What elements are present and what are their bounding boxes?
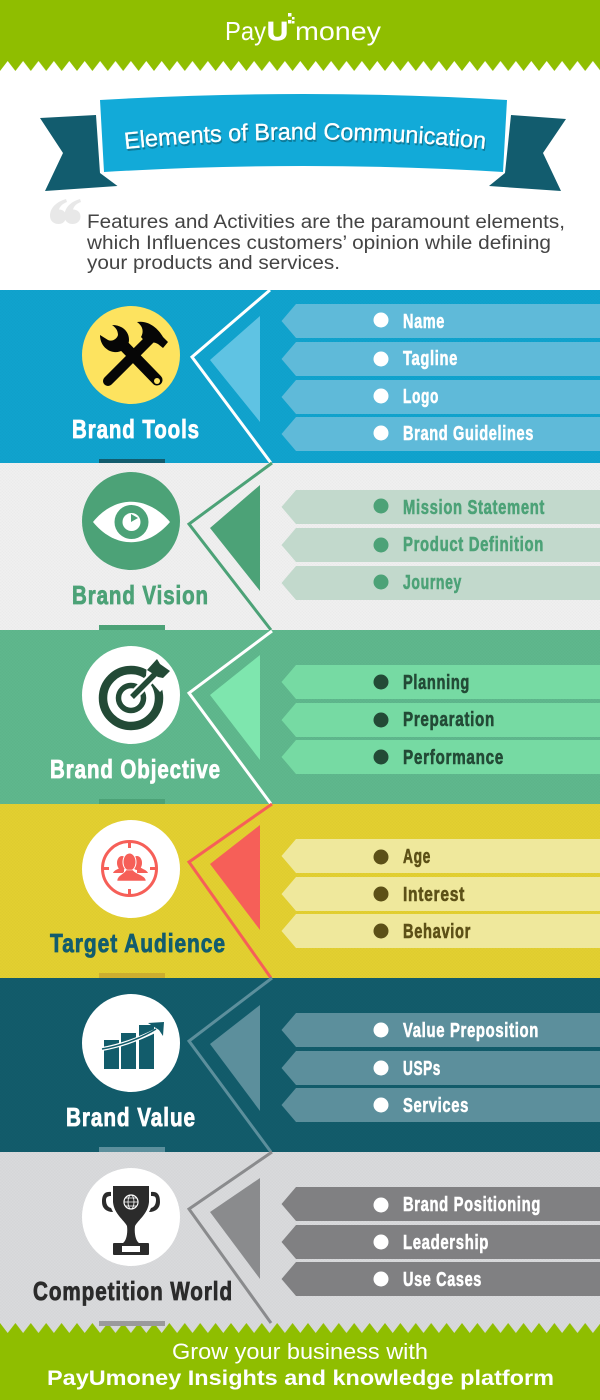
panel: competition world <box>0 1152 600 1333</box>
list: items: Name <box>403 311 445 333</box>
triangle <box>210 825 260 930</box>
list: items: Logo <box>403 386 439 408</box>
list: items: Services <box>403 1095 469 1117</box>
list: items: Product Definition <box>403 534 544 556</box>
list: items <box>282 1187 600 1296</box>
triangle <box>210 655 260 760</box>
icon: quotation mark <box>50 199 81 224</box>
list: items <box>282 665 600 774</box>
footer text: PayUmoney Insights and knowledge platform <box>47 1366 554 1390</box>
chevron outline <box>189 978 272 1152</box>
intro text: which Influences customers’ opinion while defining <box>86 233 551 254</box>
list: items: USPs <box>403 1058 441 1080</box>
footer text <box>47 1339 554 1390</box>
triangle <box>210 1178 260 1279</box>
triangle <box>210 485 260 591</box>
icon: target and arrow <box>82 646 180 744</box>
heading: Competition World <box>33 1276 233 1306</box>
heading: Brand Tools <box>72 414 200 444</box>
footer text: Grow your business with <box>172 1339 428 1364</box>
chevron outline <box>189 804 272 978</box>
icon: audience crosshair <box>82 820 180 918</box>
list: items: Performance <box>403 747 504 769</box>
logo: PayU money <box>225 13 381 46</box>
icon: growth bars <box>82 994 180 1092</box>
list: items <box>282 304 600 451</box>
triangle <box>210 1005 260 1111</box>
triangle <box>210 316 260 422</box>
list: items: Leadership <box>403 1232 489 1254</box>
list: items: Tagline <box>403 348 458 370</box>
panel: brand value <box>0 978 600 1152</box>
list: items: Brand Guidelines <box>403 423 534 445</box>
heading: Brand Vision <box>72 580 209 610</box>
intro text: Features and Activities are the paramount elements, <box>87 212 565 233</box>
icon: eye <box>82 472 180 570</box>
chevron outline <box>189 1152 272 1323</box>
list: items <box>282 1013 600 1122</box>
logo: PayU money: money <box>295 16 381 46</box>
heading: Brand Value <box>66 1102 196 1132</box>
list: items <box>282 839 600 948</box>
heading: Brand Objective <box>50 754 221 784</box>
panel: brand vision <box>0 463 600 630</box>
ribbon title text: Elements of Brand Communication <box>125 122 486 151</box>
panel: brand objective <box>0 630 600 804</box>
intro text <box>86 212 565 274</box>
list: items: Brand Positioning <box>403 1194 541 1216</box>
list: items: Mission Statement <box>403 497 545 519</box>
list: items: Age <box>403 846 431 868</box>
logo: PayU money: Pay <box>225 16 266 46</box>
logo: PayU money: U <box>267 16 288 46</box>
list: items: Interest <box>403 884 465 906</box>
panel: brand tools <box>0 290 600 463</box>
icon: trophy with globe <box>82 1168 180 1266</box>
footer band <box>0 1321 600 1400</box>
list: items: Use Cases <box>403 1269 482 1291</box>
list: items: Value Preposition <box>403 1020 539 1042</box>
chevron outline <box>189 631 272 804</box>
intro text: your products and services. <box>87 253 340 274</box>
chevron outline <box>189 463 272 630</box>
icon: wrench and hammer <box>82 306 180 404</box>
list: items: Journey <box>403 572 462 594</box>
list: items: Planning <box>403 672 470 694</box>
header band with logo <box>0 0 600 71</box>
chevron outline <box>192 290 271 463</box>
heading: Target Audience <box>50 928 226 958</box>
list: items: Preparation <box>403 709 495 731</box>
list: items: Behavior <box>403 921 471 943</box>
title ribbon <box>40 94 566 191</box>
panel: target audience <box>0 804 600 978</box>
list: items <box>282 490 600 600</box>
